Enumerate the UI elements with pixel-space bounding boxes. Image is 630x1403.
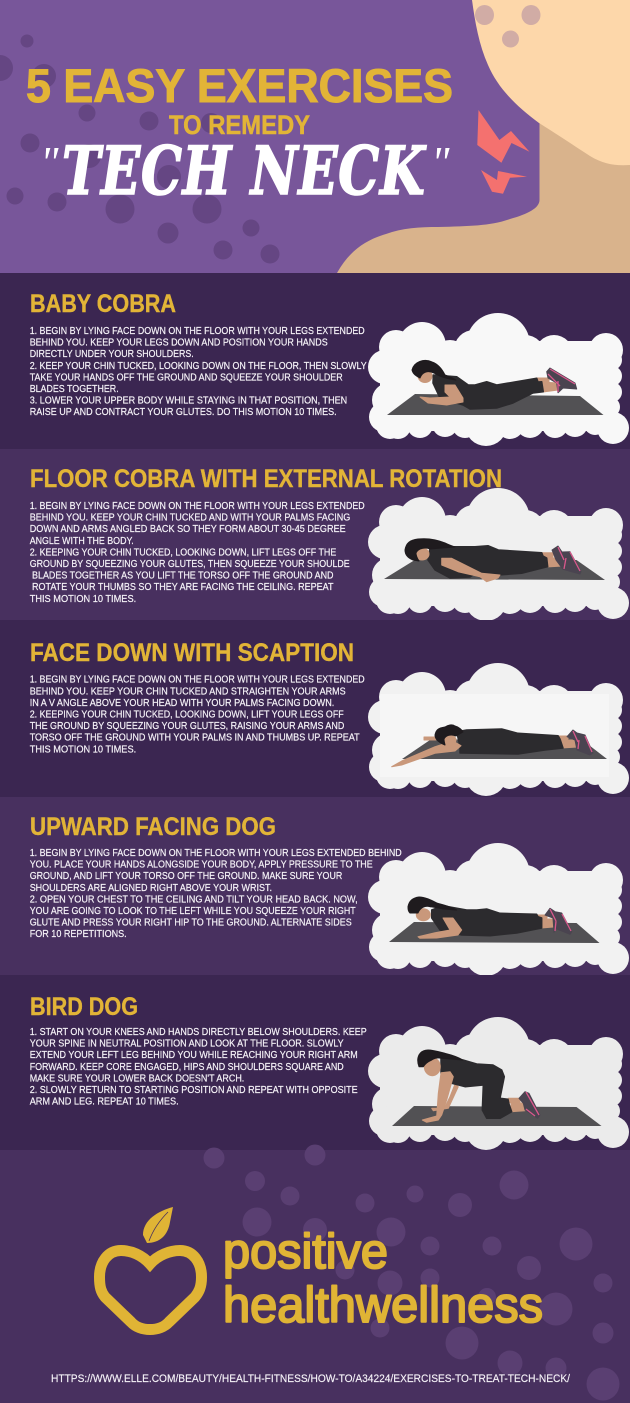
instructions: YOU. PLACE YOUR HANDS ALONGSIDE YOUR BODY, APPLY PRESSURE TO THE	[30, 860, 373, 871]
instructions: BLADES TOGETHER.	[30, 384, 119, 395]
instructions: YOUR SPINE IN NEUTRAL POSITION AND LOOK AT THE FLOOR. SLOWLY	[30, 1039, 344, 1050]
heading: BABY COBRA	[30, 290, 176, 318]
instructions: ANGLE WITH THE BODY.	[30, 536, 134, 547]
logo: wordmark	[223, 1225, 543, 1333]
instructions: 1. BEGIN BY LYING FACE DOWN ON THE FLOOR WITH YOUR LEGS EXTENDED	[30, 501, 365, 512]
icon: pain bolt large	[477, 110, 530, 163]
title line 3: TECH NECK	[62, 132, 427, 210]
logo: wordmark: positive	[223, 1225, 388, 1279]
instructions: BLADES TOGETHER AS YOU LIFT THE TORSO OFF THE GROUND AND	[32, 571, 334, 582]
heading: UPWARD FACING DOG	[30, 813, 276, 841]
panel: baby cobra	[0, 273, 630, 449]
title line 2: TO REMEDY	[169, 110, 310, 140]
heading: FACE DOWN WITH SCAPTION	[30, 639, 354, 667]
instructions: YOU ARE GOING TO LOOK TO THE LEFT WHILE YOU SQUEEZE YOUR RIGHT	[30, 906, 356, 917]
instructions	[30, 326, 367, 418]
cloud backdrop	[368, 1017, 629, 1150]
title line 1: 5 EASY EXERCISES	[26, 59, 453, 112]
heading: FLOOR COBRA WITH EXTERNAL ROTATION	[30, 465, 502, 493]
panel: bird dog	[0, 975, 630, 1150]
photo: scaption pose	[380, 694, 609, 777]
illustration: head	[472, 0, 630, 165]
instructions: BEHIND YOU. KEEP YOUR CHIN TUCKED AND STRAIGHTEN YOUR ARMS	[30, 686, 346, 697]
instructions: GROUND, AND LIFT YOUR TORSO OFF THE GROUND. MAKE SURE YOUR	[30, 871, 342, 882]
photo: floor cobra pose	[384, 539, 605, 582]
instructions: DIRECTLY UNDER YOUR SHOULDERS.	[30, 349, 194, 360]
instructions: 2. SLOWLY RETURN TO STARTING POSITION AND REPEAT WITH OPPOSITE	[30, 1085, 358, 1096]
logo: wordmark: healthwellness	[223, 1277, 543, 1333]
photo: upward dog pose	[389, 897, 600, 943]
photo: baby cobra pose	[387, 360, 604, 415]
instructions: ARM AND LEG. REPEAT 10 TIMES.	[30, 1097, 179, 1108]
instructions: GROUND BY SQUEEZING YOUR GLUTES, THEN SQUEEZE YOUR SHOULDE	[30, 559, 350, 570]
instructions: BEHIND YOU. KEEP YOUR CHIN TUCKED AND WITH YOUR PALMS FACING	[30, 513, 350, 524]
instructions: THIS MOTION 10 TIMES.	[30, 594, 136, 605]
instructions: RAISE UP AND CONTRACT YOUR GLUTES. DO THIS MOTION 10 TIMES.	[30, 407, 337, 418]
instructions: DOWN AND ARMS ANGLED BACK SO THEY FORM ABOUT 30-45 DEGREE	[30, 524, 346, 535]
instructions: BEHIND YOU. KEEP YOUR LEGS DOWN AND POSITION YOUR HANDS	[30, 338, 328, 349]
instructions: 2. KEEPING YOUR CHIN TUCKED, LOOKING DOWN, LIFT YOUR LEGS OFF	[30, 710, 344, 720]
instructions: GLUTE AND PRESS YOUR RIGHT HIP TO THE GROUND. ALTERNATE SIDES	[30, 918, 352, 929]
instructions: ROTATE YOUR THUMBS SO THEY ARE FACING THE CEILING. REPEAT	[32, 582, 334, 593]
instructions: 2. OPEN YOUR CHEST TO THE CEILING AND TILT YOUR HEAD BACK. NOW,	[30, 894, 358, 905]
instructions: 2. KEEPING YOUR CHIN TUCKED, LOOKING DOWN, LIFT LEGS OFF THE	[30, 547, 336, 558]
instructions: 3. LOWER YOUR UPPER BODY WHILE STAYING IN THAT POSITION, THEN	[30, 396, 347, 407]
instructions	[30, 501, 365, 605]
logo: leaf	[143, 1207, 173, 1243]
illustration: neck	[337, 115, 630, 273]
instructions: SHOULDERS ARE ALIGNED RIGHT ABOVE YOUR WRIST.	[30, 883, 272, 894]
panel: footer	[0, 1144, 630, 1403]
instructions: THE GROUND BY SQUEEZING YOUR GLUTES, RAISING YOUR ARMS AND	[30, 721, 344, 732]
source url: HTTPS://WWW.ELLE.COM/BEAUTY/HEALTH-FITNESS/HOW-TO/A34224/EXERCISES-TO-TREAT-TECH-NECK/	[51, 1373, 571, 1385]
instructions: FORWARD. KEEP CORE ENGAGED, HIPS AND SHOULDERS SQUARE AND	[30, 1062, 344, 1073]
icon: pain bolt small	[481, 170, 527, 194]
cloud backdrop	[368, 488, 629, 621]
instructions: 1. BEGIN BY LYING FACE DOWN ON THE FLOOR WITH YOUR LEGS EXTENDED BEHIND	[30, 848, 402, 859]
photo: bird dog pose	[392, 1050, 602, 1126]
instructions: EXTEND YOUR LEFT LEG BEHIND YOU WHILE REACHING YOUR RIGHT ARM	[30, 1050, 358, 1061]
heading: BIRD DOG	[30, 993, 138, 1021]
panel: face down with scaption	[0, 620, 630, 797]
instructions: FOR 10 REPETITIONS.	[30, 929, 127, 940]
instructions: TAKE YOUR HANDS OFF THE GROUND AND SQUEEZE YOUR SHOULDER	[30, 372, 343, 383]
cloud backdrop	[368, 663, 629, 796]
instructions: 1. BEGIN BY LYING FACE DOWN ON THE FLOOR WITH YOUR LEGS EXTENDED	[30, 675, 365, 686]
instructions: MAKE SURE YOUR LOWER BACK DOESN'T ARCH.	[30, 1073, 244, 1084]
instructions	[30, 675, 365, 755]
illustration: head spots	[475, 5, 540, 48]
panel: floor cobra	[0, 449, 630, 621]
instructions: 1. START ON YOUR KNEES AND HANDS DIRECTLY BELOW SHOULDERS. KEEP	[30, 1027, 367, 1038]
instructions: 2. KEEP YOUR CHIN TUCKED, LOOKING DOWN ON THE FLOOR, THEN SLOWLY	[30, 361, 367, 372]
instructions: THIS MOTION 10 TIMES.	[30, 744, 136, 755]
instructions: TORSO OFF THE GROUND WITH YOUR PALMS IN AND THUMBS UP. REPEAT	[30, 733, 360, 744]
panel: upward facing dog	[0, 797, 630, 976]
background dots	[204, 1144, 620, 1400]
logo: heart	[100, 1250, 202, 1330]
background dots	[0, 34, 280, 264]
instructions: IN A V ANGLE ABOVE YOUR HEAD WITH YOUR PALMS FACING DOWN.	[30, 698, 334, 709]
cloud backdrop	[368, 843, 629, 976]
title line 3: "	[40, 138, 59, 187]
instructions: 1. BEGIN BY LYING FACE DOWN ON THE FLOOR WITH YOUR LEGS EXTENDED	[30, 326, 365, 337]
instructions	[30, 1027, 367, 1108]
instructions	[30, 848, 402, 940]
panel: header	[0, 0, 630, 273]
cloud backdrop	[368, 313, 629, 446]
title line 3: "	[431, 138, 450, 187]
